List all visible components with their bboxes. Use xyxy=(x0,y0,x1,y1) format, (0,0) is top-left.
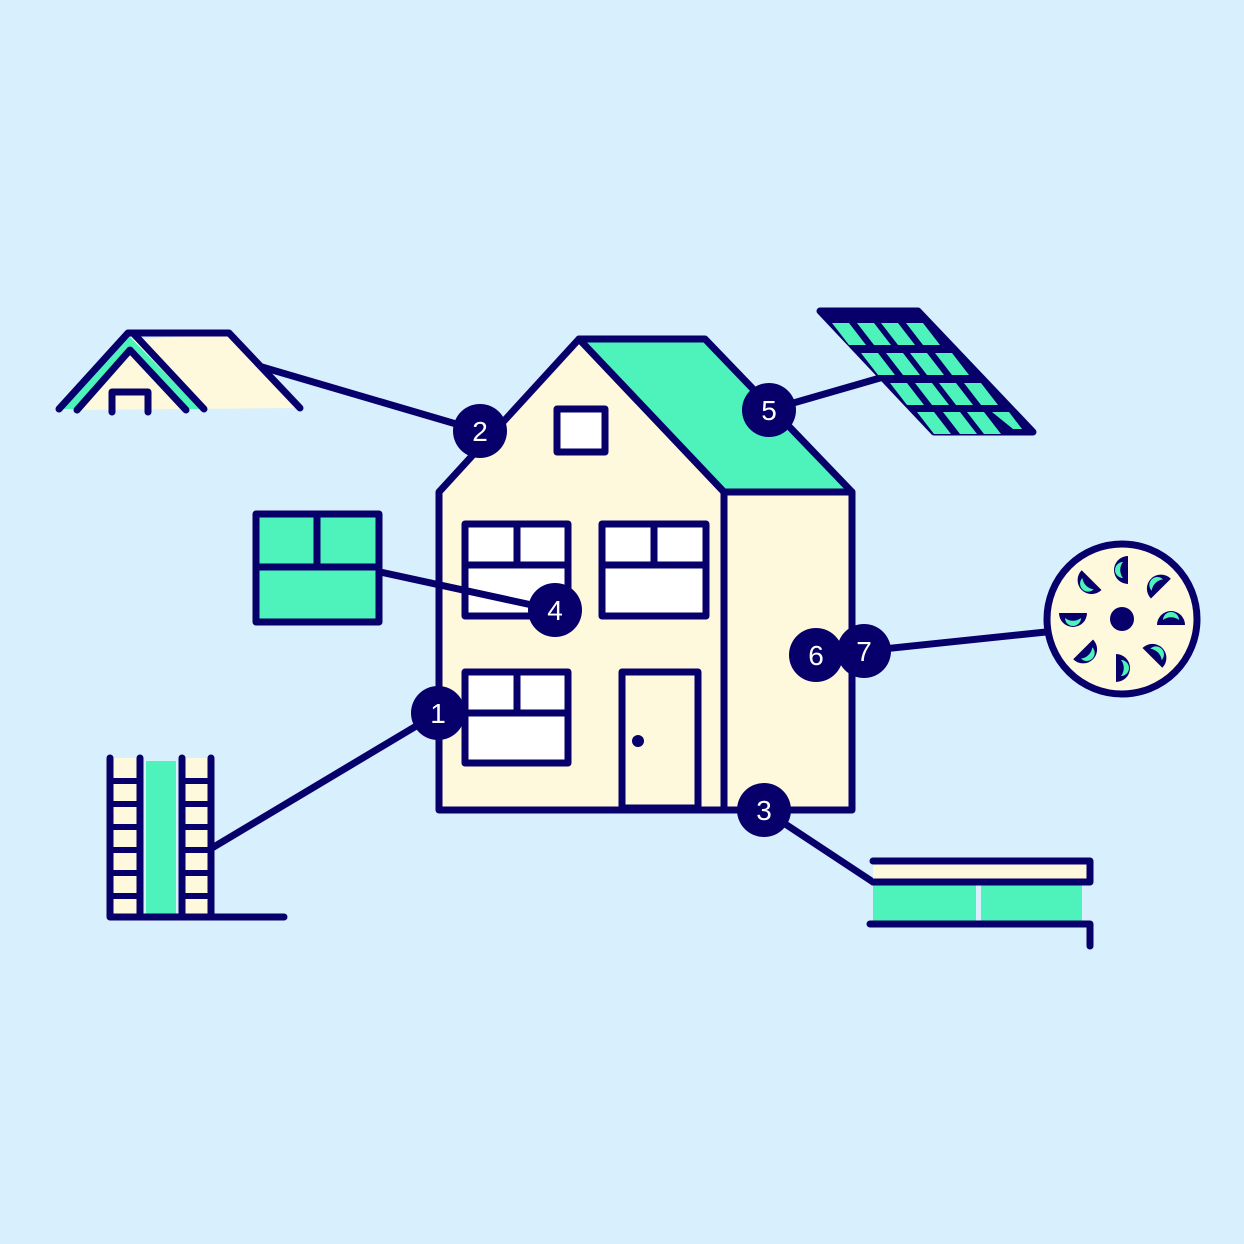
icon: floor insulation xyxy=(870,861,1090,946)
badges xyxy=(411,383,891,837)
badge numbers: 5 xyxy=(761,395,777,426)
icon: window xyxy=(256,514,379,622)
house xyxy=(439,339,852,810)
icon: solar panel xyxy=(820,311,1033,434)
badge numbers: 4 xyxy=(547,595,563,626)
badge numbers: 2 xyxy=(472,416,488,447)
badge numbers: 6 xyxy=(808,640,824,671)
icon: attic roof xyxy=(59,333,300,412)
connector lines xyxy=(212,367,1046,882)
badge numbers: 1 xyxy=(430,698,446,729)
badge numbers xyxy=(430,395,872,826)
icon: wall insulation xyxy=(110,758,284,917)
badge numbers: 7 xyxy=(856,636,872,667)
badge numbers: 3 xyxy=(756,795,772,826)
icon: fan xyxy=(1047,544,1197,694)
